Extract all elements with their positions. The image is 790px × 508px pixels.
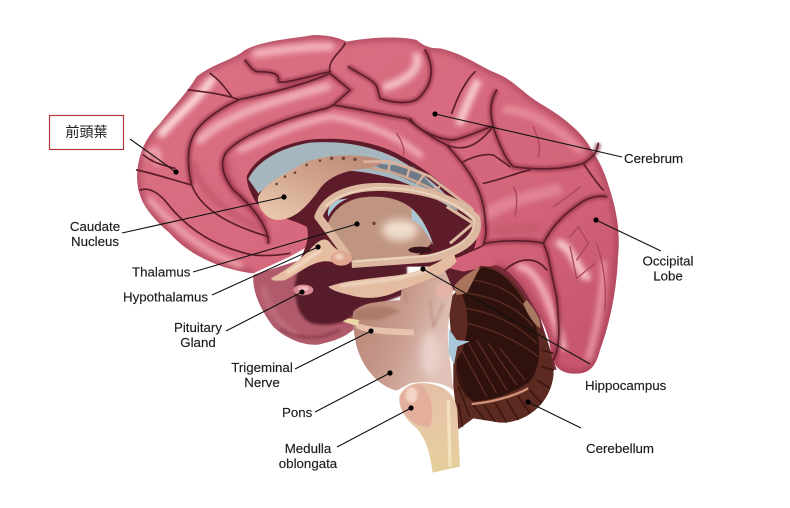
sulci shadow <box>188 50 607 360</box>
label: cerebellum: Cerebellum <box>586 441 654 456</box>
brain stem <box>353 267 453 391</box>
leader lines and dots <box>122 111 661 447</box>
blue recess <box>449 328 470 365</box>
brain illustration <box>137 35 619 473</box>
leader: cerebellum <box>525 399 581 428</box>
trigeminal nerve <box>355 322 415 335</box>
cerebrum edge shading <box>137 35 619 374</box>
leader: cerebrum <box>432 111 622 157</box>
hippocampus <box>328 252 457 298</box>
temporal lobe and basal cavity <box>253 255 557 370</box>
caudate nucleus <box>258 155 387 220</box>
gyrus shading <box>147 47 603 358</box>
callout: frontal lobe <box>50 116 124 150</box>
hypothalamus <box>271 240 352 281</box>
cerebellum <box>293 252 554 473</box>
label: trigeminal nerve: Trigeminal <box>231 360 293 375</box>
leader: hypothalamus <box>212 244 321 295</box>
label: pituitary gland: Gland <box>180 335 216 350</box>
leader: hippocampus <box>420 266 590 364</box>
sulci <box>137 43 607 360</box>
cerebrum <box>137 35 619 374</box>
callout: frontal lobe: 前頭葉 <box>66 124 108 140</box>
leader: frontal lobe <box>130 139 179 175</box>
label: trigeminal nerve: Nerve <box>244 375 280 390</box>
label: hypothalamus: Hypothalamus <box>123 290 208 304</box>
label: pituitary gland: Pituitary <box>174 320 222 335</box>
label: medulla oblongata: oblongata <box>279 456 338 471</box>
label: cerebrum: Cerebrum <box>624 151 683 166</box>
label: medulla oblongata: Medulla <box>285 441 331 456</box>
label: caudate nucleus: Nucleus <box>71 234 119 249</box>
label: thalamus: Thalamus <box>132 264 191 280</box>
leader: pons <box>315 370 393 412</box>
label: caudate nucleus: Caudate <box>70 219 120 234</box>
label: pons: Pons <box>282 405 313 420</box>
leader: thalamus <box>193 221 360 272</box>
label: hippocampus: Hippocampus <box>585 378 667 393</box>
thalamus <box>327 197 432 260</box>
medulla <box>399 383 460 473</box>
leader: occipital lobe <box>593 217 661 251</box>
leader: trigeminal nerve <box>295 328 374 369</box>
fornix <box>318 187 477 264</box>
central cavity <box>247 139 477 281</box>
leader: caudate <box>122 194 287 233</box>
label: occipital lobe: Occipital <box>642 254 694 268</box>
leader: pituitary <box>226 289 305 331</box>
leader: medulla <box>337 405 414 447</box>
ventricle <box>248 142 458 212</box>
pituitary gland <box>293 285 313 295</box>
label: occipital lobe: Lobe <box>653 268 683 284</box>
minor creases <box>397 127 605 310</box>
